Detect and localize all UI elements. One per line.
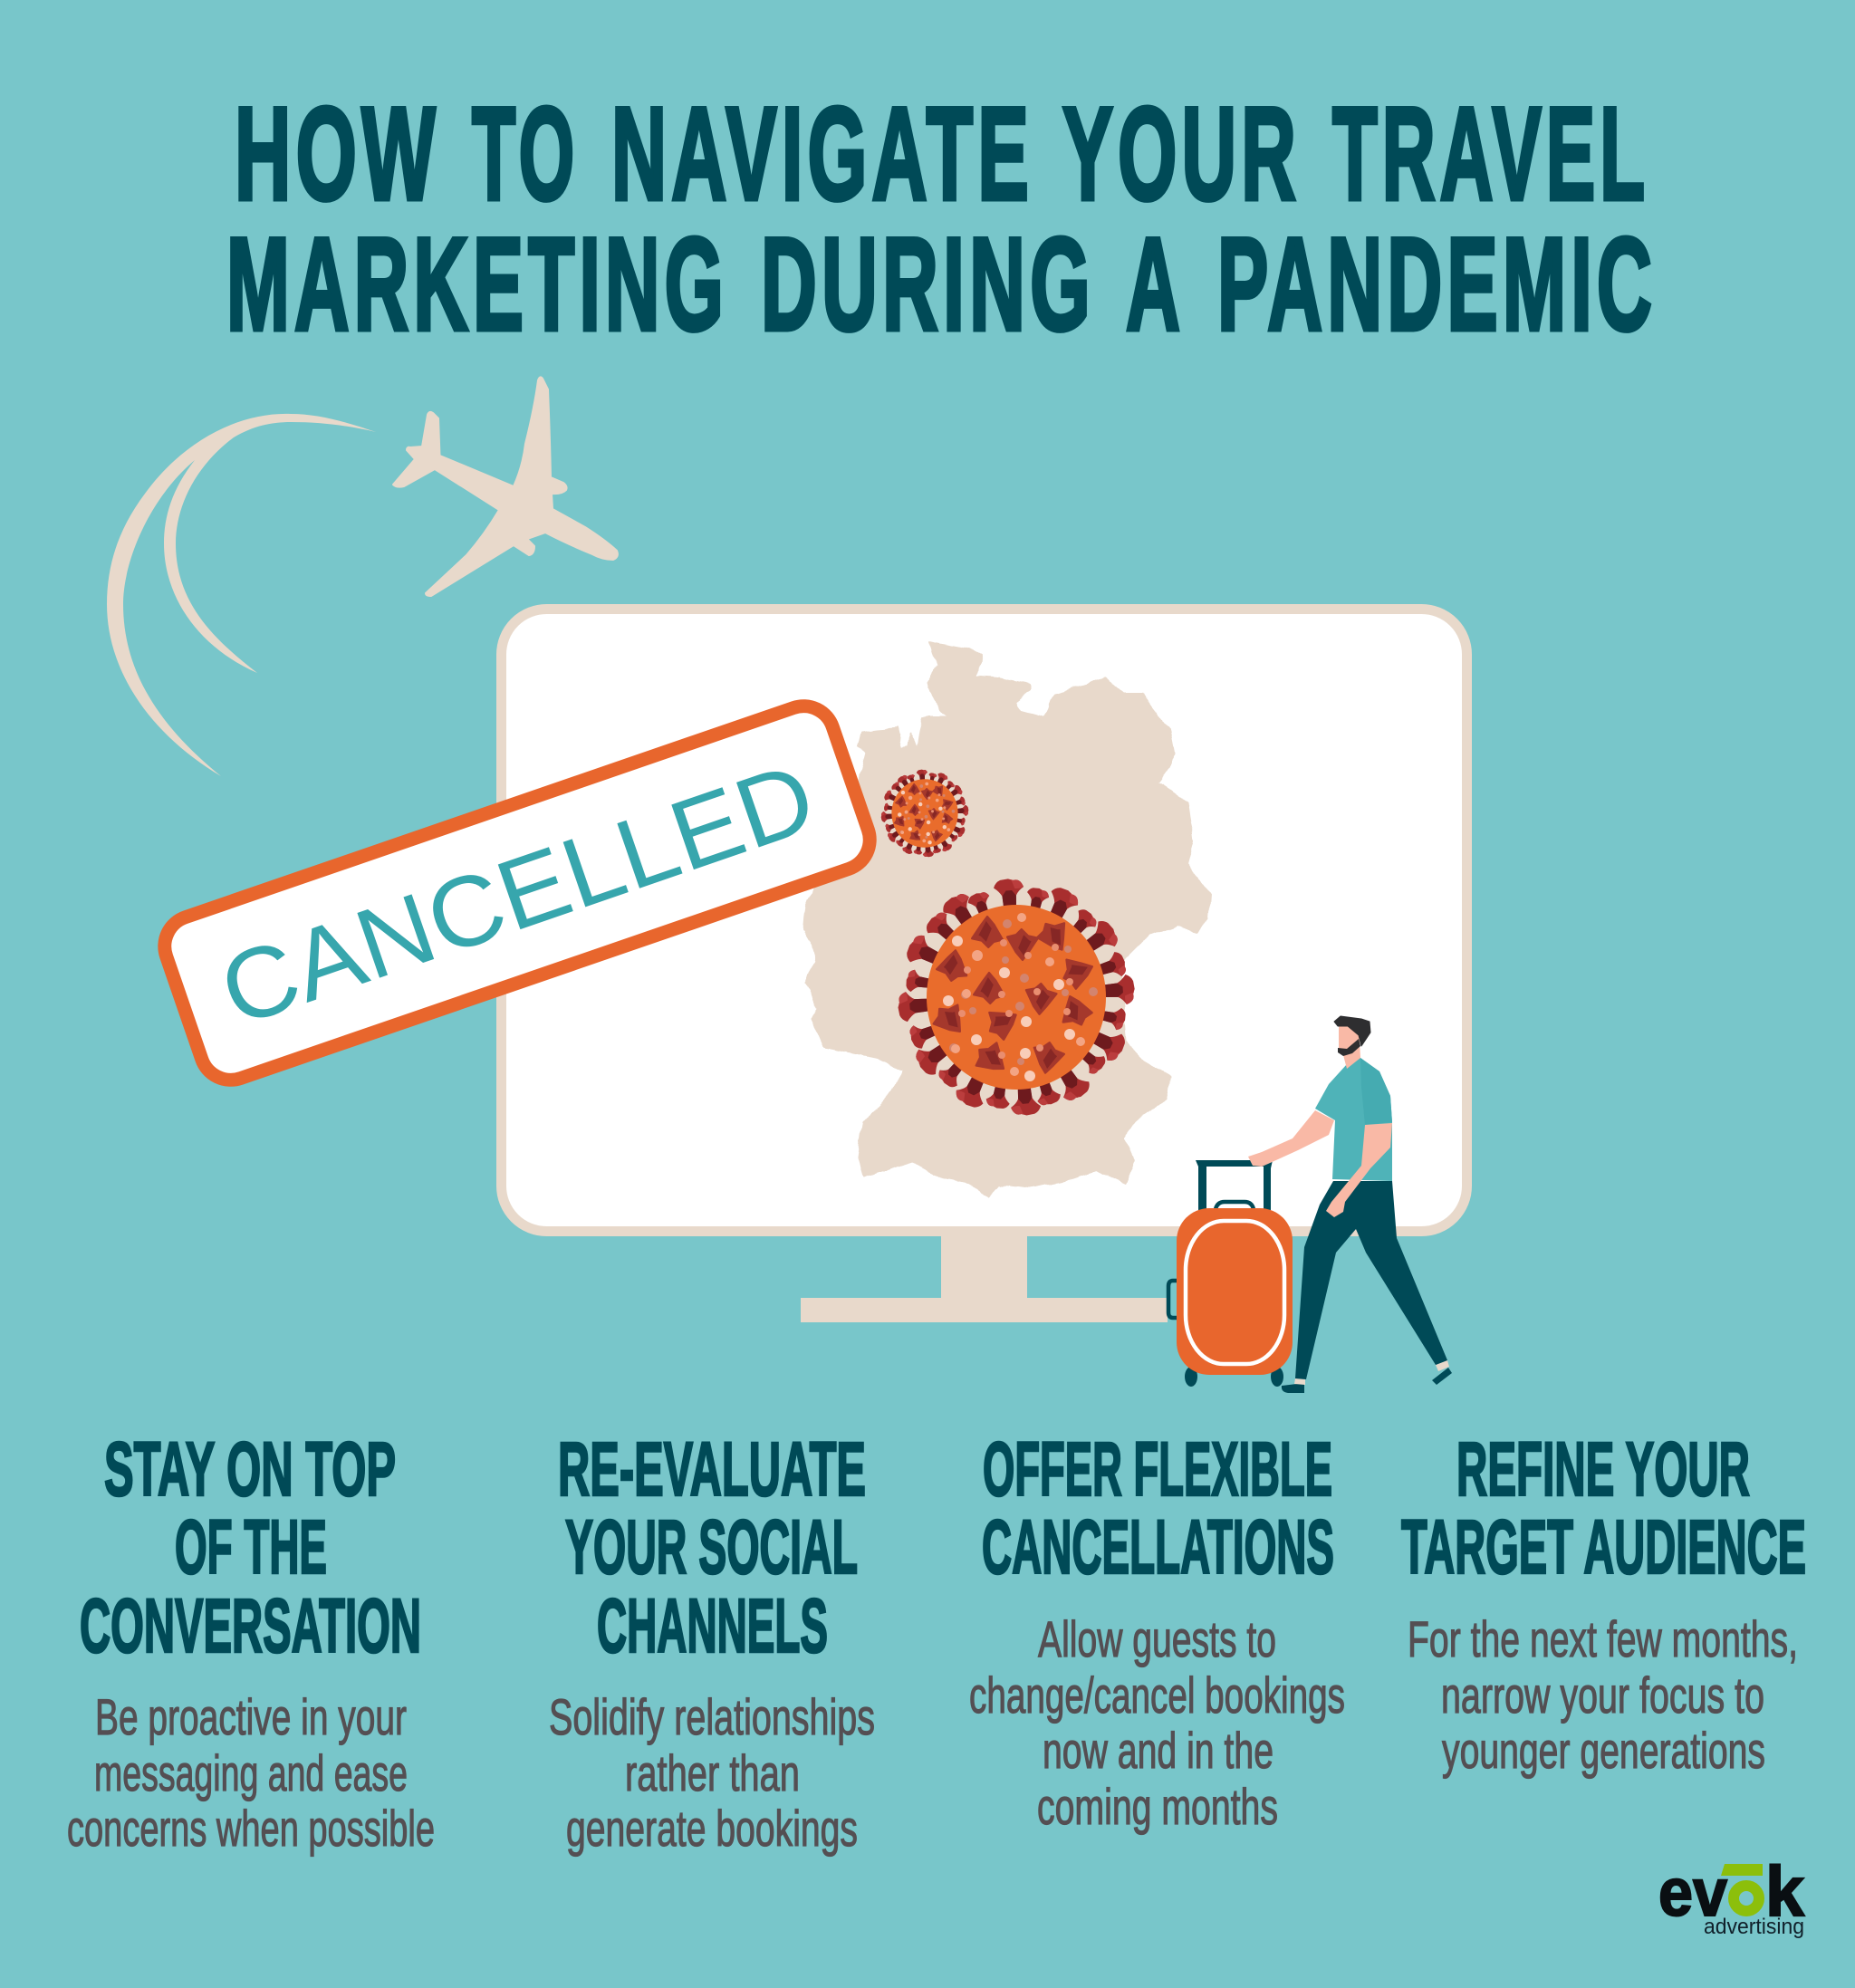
title: TO bbox=[472, 80, 579, 227]
heading: CHANNELS bbox=[597, 1583, 828, 1668]
suitcase top grip bbox=[1216, 1202, 1254, 1209]
column 3: offer flexible cancellations bbox=[969, 1426, 1345, 1835]
suitcase body bbox=[1177, 1208, 1293, 1375]
heading: CANCELLATIONS bbox=[982, 1504, 1334, 1589]
column 2: re-evaluate your social channels bbox=[549, 1426, 875, 1857]
back shoe bbox=[1282, 1383, 1304, 1393]
icon: airplane bbox=[393, 377, 618, 596]
stamp frame bbox=[157, 697, 878, 1089]
body text bbox=[67, 1688, 435, 1857]
icon: contrail swoosh bbox=[107, 414, 376, 776]
trousers bbox=[1295, 1181, 1447, 1379]
body text: Allow guests to bbox=[1038, 1610, 1276, 1667]
title: A bbox=[1126, 210, 1185, 358]
stamp text: CANCELLED bbox=[207, 741, 828, 1048]
front shoe bbox=[1432, 1368, 1452, 1385]
shirt bbox=[1315, 1058, 1392, 1181]
title: DURING bbox=[761, 210, 1095, 358]
body text: Solidify relationships bbox=[549, 1688, 875, 1745]
body text bbox=[1408, 1610, 1798, 1779]
logo letters ev: ev bbox=[1658, 1855, 1727, 1930]
logo letter k: k bbox=[1765, 1851, 1805, 1931]
body text: generate bookings bbox=[566, 1800, 858, 1857]
body text: rather than bbox=[625, 1744, 800, 1801]
person with suitcase bbox=[1168, 1016, 1452, 1393]
body text: messaging and ease bbox=[94, 1744, 408, 1801]
heading: OFFER FLEXIBLE bbox=[983, 1426, 1332, 1512]
body text: now and in the bbox=[1043, 1722, 1274, 1779]
wheels bbox=[1185, 1367, 1197, 1387]
logo subline: advertising bbox=[1704, 1915, 1804, 1939]
body text: concerns when possible bbox=[67, 1800, 435, 1857]
suitcase side handle bbox=[1168, 1281, 1177, 1318]
map of Germany bbox=[803, 642, 1209, 1197]
cancelled stamp bbox=[157, 697, 878, 1089]
heading bbox=[1401, 1426, 1806, 1589]
body text: coming months bbox=[1037, 1778, 1278, 1835]
heading bbox=[982, 1426, 1334, 1589]
column 4: refine your target audience bbox=[1401, 1426, 1806, 1779]
heading: STAY ON TOP bbox=[104, 1426, 396, 1512]
body text: change/cancel bookings bbox=[969, 1666, 1345, 1724]
body text bbox=[549, 1688, 875, 1857]
monitor stand bbox=[801, 1232, 1168, 1322]
heading: OF THE bbox=[175, 1504, 327, 1589]
far arm bbox=[1248, 1110, 1334, 1167]
monitor bbox=[502, 609, 1467, 1322]
heading: RE-EVALUATE bbox=[558, 1426, 866, 1512]
body text: Be proactive in your bbox=[95, 1688, 407, 1745]
title: HOW bbox=[235, 80, 440, 227]
heading: YOUR SOCIAL bbox=[565, 1504, 858, 1589]
beard bbox=[1338, 1039, 1360, 1056]
title: YOUR bbox=[1062, 80, 1301, 227]
title: MARKETING bbox=[226, 210, 728, 358]
near arm bbox=[1326, 1123, 1392, 1217]
monitor screen bbox=[502, 609, 1467, 1232]
heading: CONVERSATION bbox=[80, 1583, 421, 1668]
suitcase handle bbox=[1196, 1160, 1273, 1211]
hair bbox=[1334, 1016, 1370, 1046]
logo macron bbox=[1721, 1864, 1763, 1876]
face and neck bbox=[1339, 1024, 1360, 1069]
logo ring o bbox=[1734, 1886, 1759, 1911]
column 1: stay on top of the conversation bbox=[67, 1426, 435, 1857]
small virus bbox=[880, 769, 969, 858]
body text bbox=[969, 1610, 1345, 1835]
heading bbox=[558, 1426, 866, 1668]
large virus bbox=[897, 878, 1136, 1117]
title bbox=[226, 80, 1657, 358]
title: NAVIGATE bbox=[611, 80, 1033, 227]
evok advertising logo bbox=[1658, 1851, 1805, 1939]
heading bbox=[80, 1426, 421, 1668]
